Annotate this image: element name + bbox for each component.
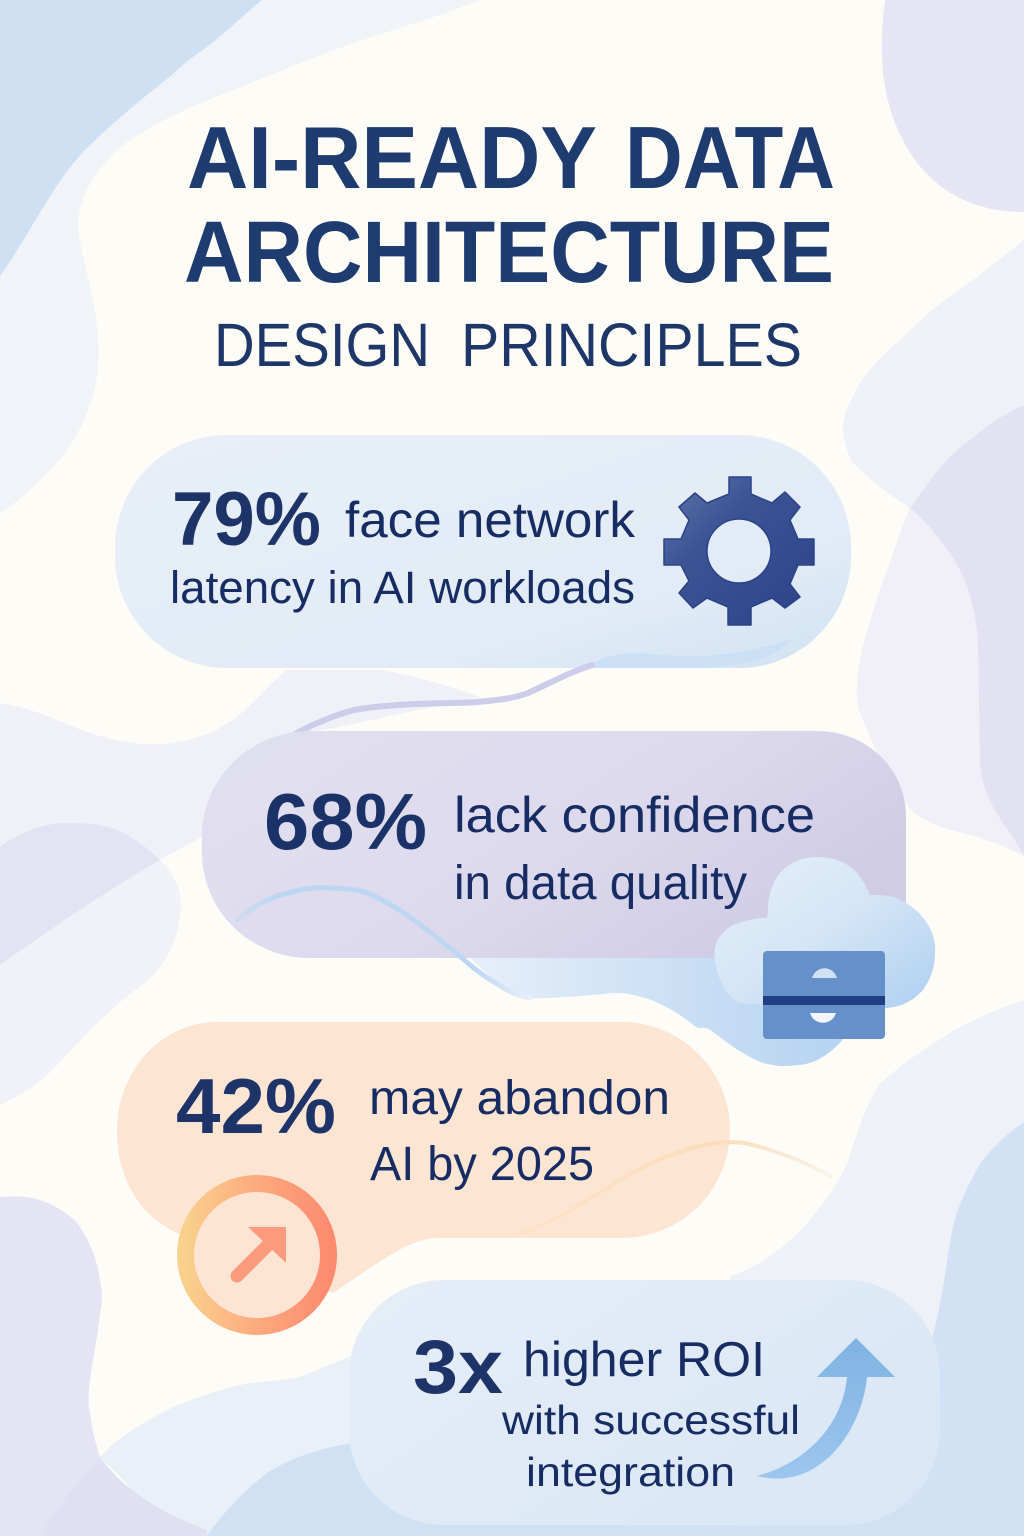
connector: blue stream into cloud (237, 888, 850, 1066)
title: DATA (625, 108, 835, 207)
icon: curved up arrow (757, 1338, 895, 1479)
icon: gear (664, 477, 814, 625)
subtitle: PRINCIPLES (461, 311, 802, 379)
text: ROI description (501, 1333, 800, 1495)
text: ROI description: integration (526, 1449, 735, 1495)
text: latency description: face network (345, 492, 636, 548)
text: ROI description: higher ROI (523, 1333, 765, 1387)
title (184, 108, 835, 301)
connector: lavender wave (290, 665, 592, 737)
subtitle (214, 311, 802, 379)
connector: peach wave (510, 1142, 830, 1236)
text: latency description: latency in AI workloads (170, 562, 635, 613)
text: ROI description: with successful (501, 1397, 800, 1443)
stat: 3x: 3x (413, 1325, 503, 1410)
stat: 79%: 79% (172, 477, 321, 562)
text: latency description (170, 492, 636, 613)
storage drawer (763, 951, 885, 1039)
panel: abandon AI (117, 1022, 730, 1293)
text: abandon description: AI by 2025 (370, 1138, 594, 1191)
panel: higher ROI (349, 1280, 940, 1525)
ribbon: blue highlight (588, 640, 790, 668)
subtitle: DESIGN (214, 311, 430, 379)
icon: circular arrow (186, 1184, 328, 1326)
text: quality description (454, 787, 815, 910)
panel: data quality (202, 731, 906, 958)
title: ARCHITECTURE (184, 204, 834, 301)
icon: cloud with storage drawer (714, 857, 935, 1039)
text: quality description: in data quality (454, 857, 747, 910)
panel: network latency (115, 435, 851, 668)
text: abandon description (369, 1072, 670, 1191)
text: quality description: lack confidence (454, 787, 815, 843)
stat: 42%: 42% (176, 1062, 336, 1150)
text: abandon description: may abandon (369, 1072, 670, 1125)
stat: 68%: 68% (264, 777, 427, 866)
title: AI-READY (187, 108, 597, 207)
